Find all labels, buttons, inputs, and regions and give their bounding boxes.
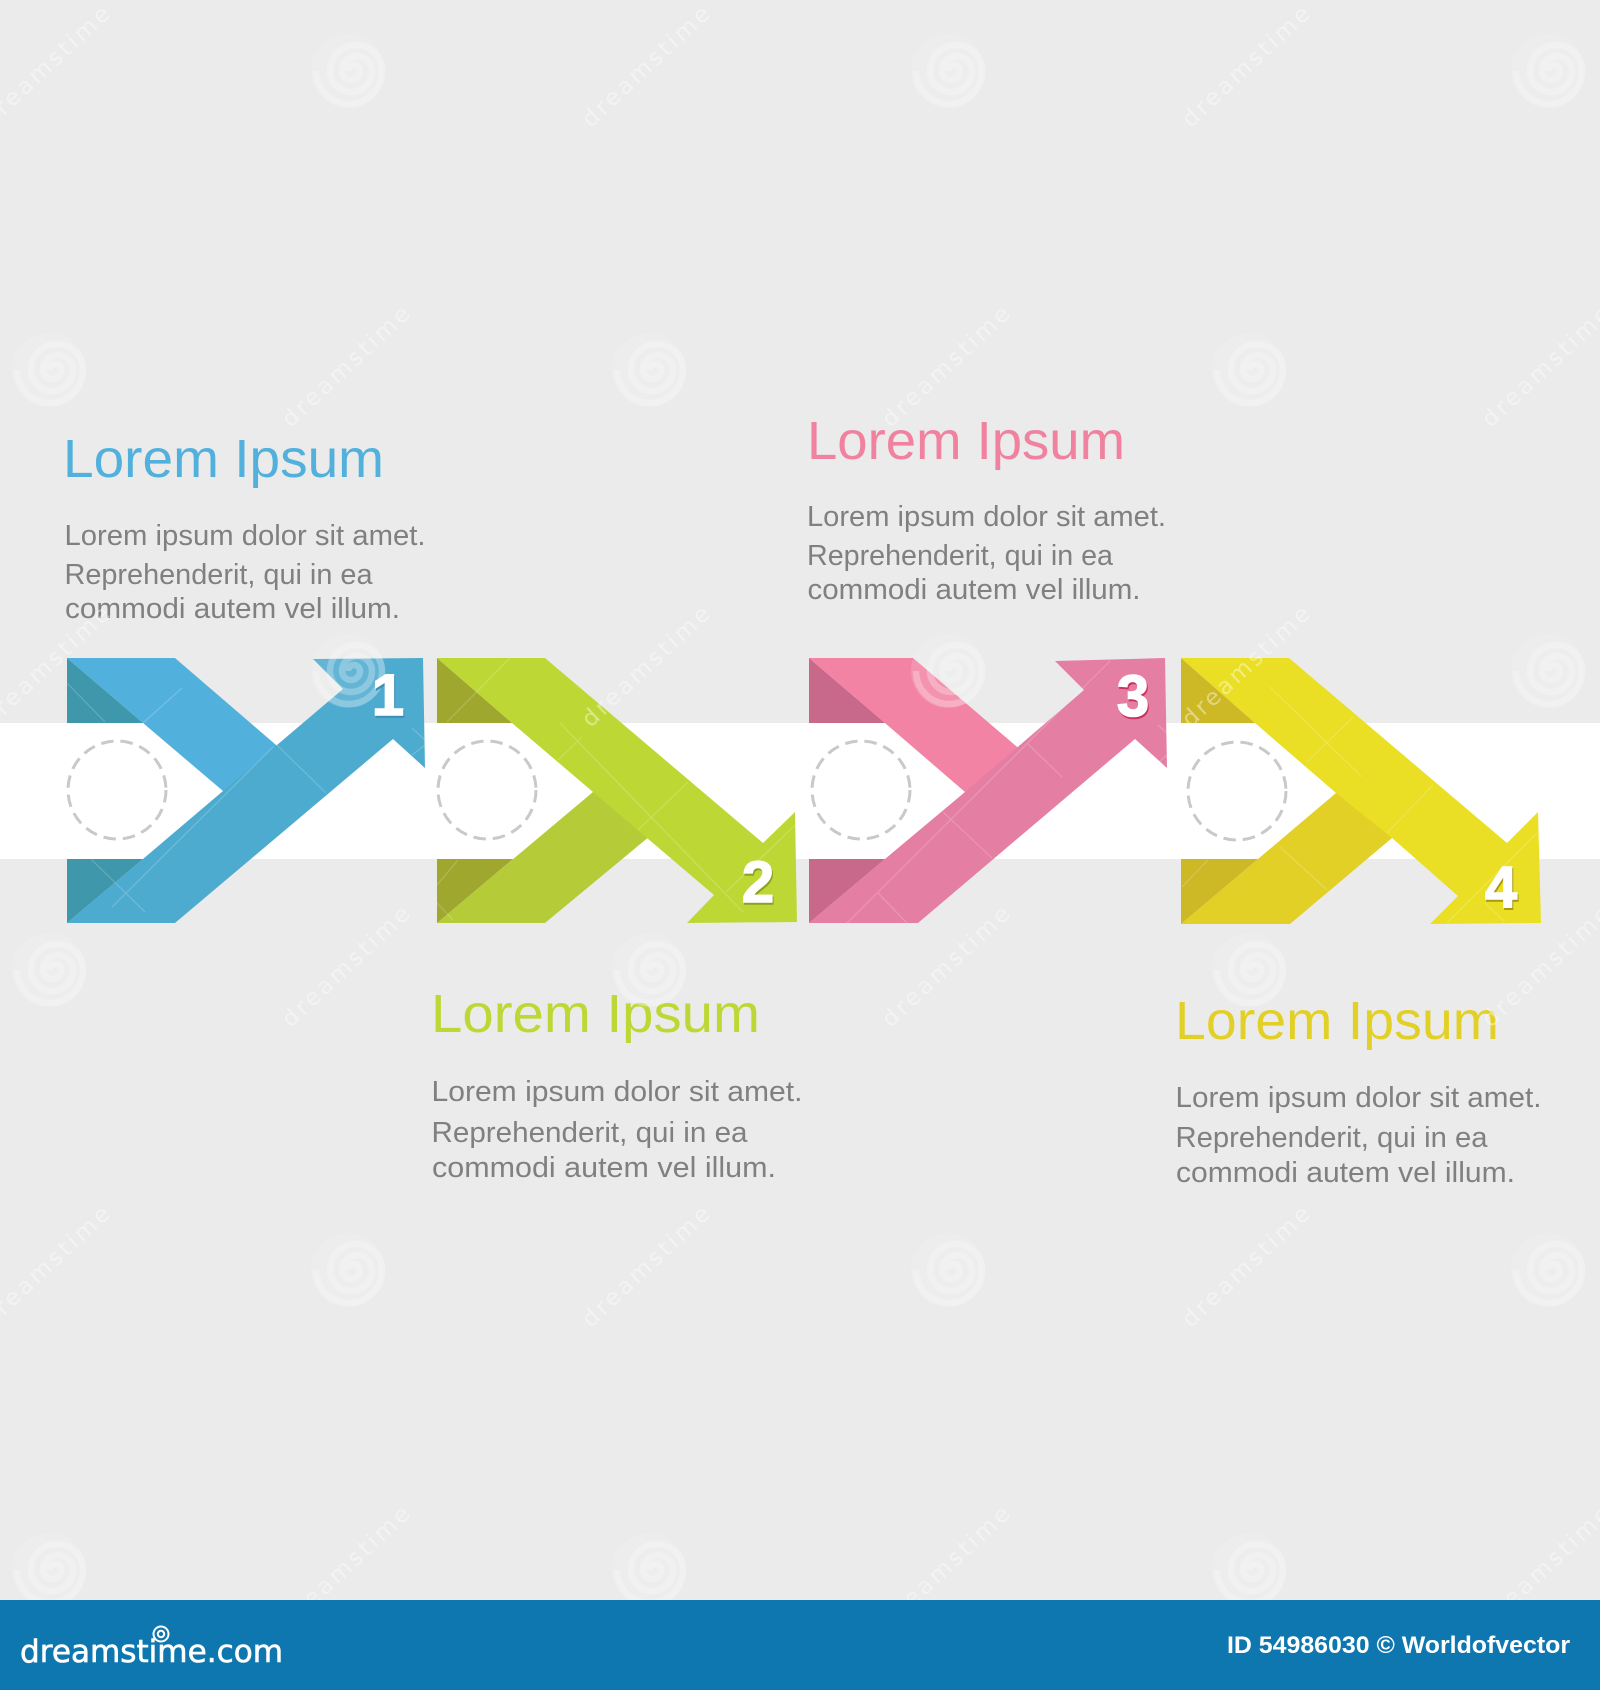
watermark layer: dreamstime [577,1201,715,1333]
panel: step 3 pink arrow [809,658,1167,923]
body text: step 3: Lorem ipsum dolor sit amet. [807,501,1166,533]
icon: dashed circle 1 [68,741,166,839]
watermark layer: dreamstime [577,601,715,733]
footer image id and credit: ID 54986030 © Worldofvector [1227,1632,1570,1659]
watermark layer: dreamstime [877,301,1015,433]
white timeline band [0,723,1600,859]
watermark layer: dreamstime [277,301,415,433]
icon: dashed circle 3 [812,741,910,839]
number 2: 2 [742,850,774,915]
body text: step 3 [807,501,1166,606]
watermark layer: dreamstime [877,901,1015,1033]
body text: step 4: Lorem ipsum dolor sit amet. [1176,1082,1542,1114]
body text: step 1: commodi autem vel illum. [65,593,400,625]
heading: step 1: Lorem Ipsum [63,429,384,489]
body text: step 2: Reprehenderit, qui in ea [432,1117,748,1149]
body text: step 2: commodi autem vel illum. [432,1152,776,1184]
text block: step 1 [63,429,426,625]
body text: step 1: Lorem ipsum dolor sit amet. [64,520,426,552]
icon: footer spiral [154,1626,168,1642]
body text: step 4: commodi autem vel illum. [1176,1157,1515,1189]
panel: step 2 green arrow [437,658,797,923]
body text: step 2 [432,1076,802,1184]
body text: step 1 [64,520,426,625]
icon: dashed circle 4 [1188,742,1286,840]
body text: step 4: Reprehenderit, qui in ea [1176,1122,1488,1154]
watermark layer: dreamstime [877,1501,1015,1633]
text block: step 3 [807,411,1166,606]
footer bar [0,1600,1600,1690]
text block: step 2 [431,984,802,1184]
heading: step 2: Lorem Ipsum [431,984,760,1044]
body text: step 1: Reprehenderit, qui in ea [64,559,373,591]
body text: step 2: Lorem ipsum dolor sit amet. [432,1076,802,1108]
watermark layer: dreamstime [277,901,415,1033]
footer logo text: dreamstime.com [20,1634,283,1670]
body text: step 3: Reprehenderit, qui in ea [807,540,1114,572]
panel: step 1 blue arrow [67,658,425,923]
watermark layer: dreamstime [1177,1,1315,133]
number 1: 1 [372,663,404,728]
heading: step 3: Lorem Ipsum [807,411,1125,471]
watermark layer: dreamstime [277,1501,415,1633]
watermark layer: dreamstime [1177,601,1315,733]
heading: step 4: Lorem Ipsum [1175,991,1499,1051]
panel: step 4 yellow arrow [1181,658,1541,924]
icon: dashed circle 2 [438,741,536,839]
number 4: 4 [1485,855,1517,920]
body text: step 3: commodi autem vel illum. [808,574,1140,606]
watermark layer: dreamstime [1177,1201,1315,1333]
body text: step 4 [1176,1082,1542,1189]
number 3: 3 [1117,664,1149,729]
watermark layer: dreamstime [577,1,715,133]
text block: step 4 [1175,991,1542,1189]
